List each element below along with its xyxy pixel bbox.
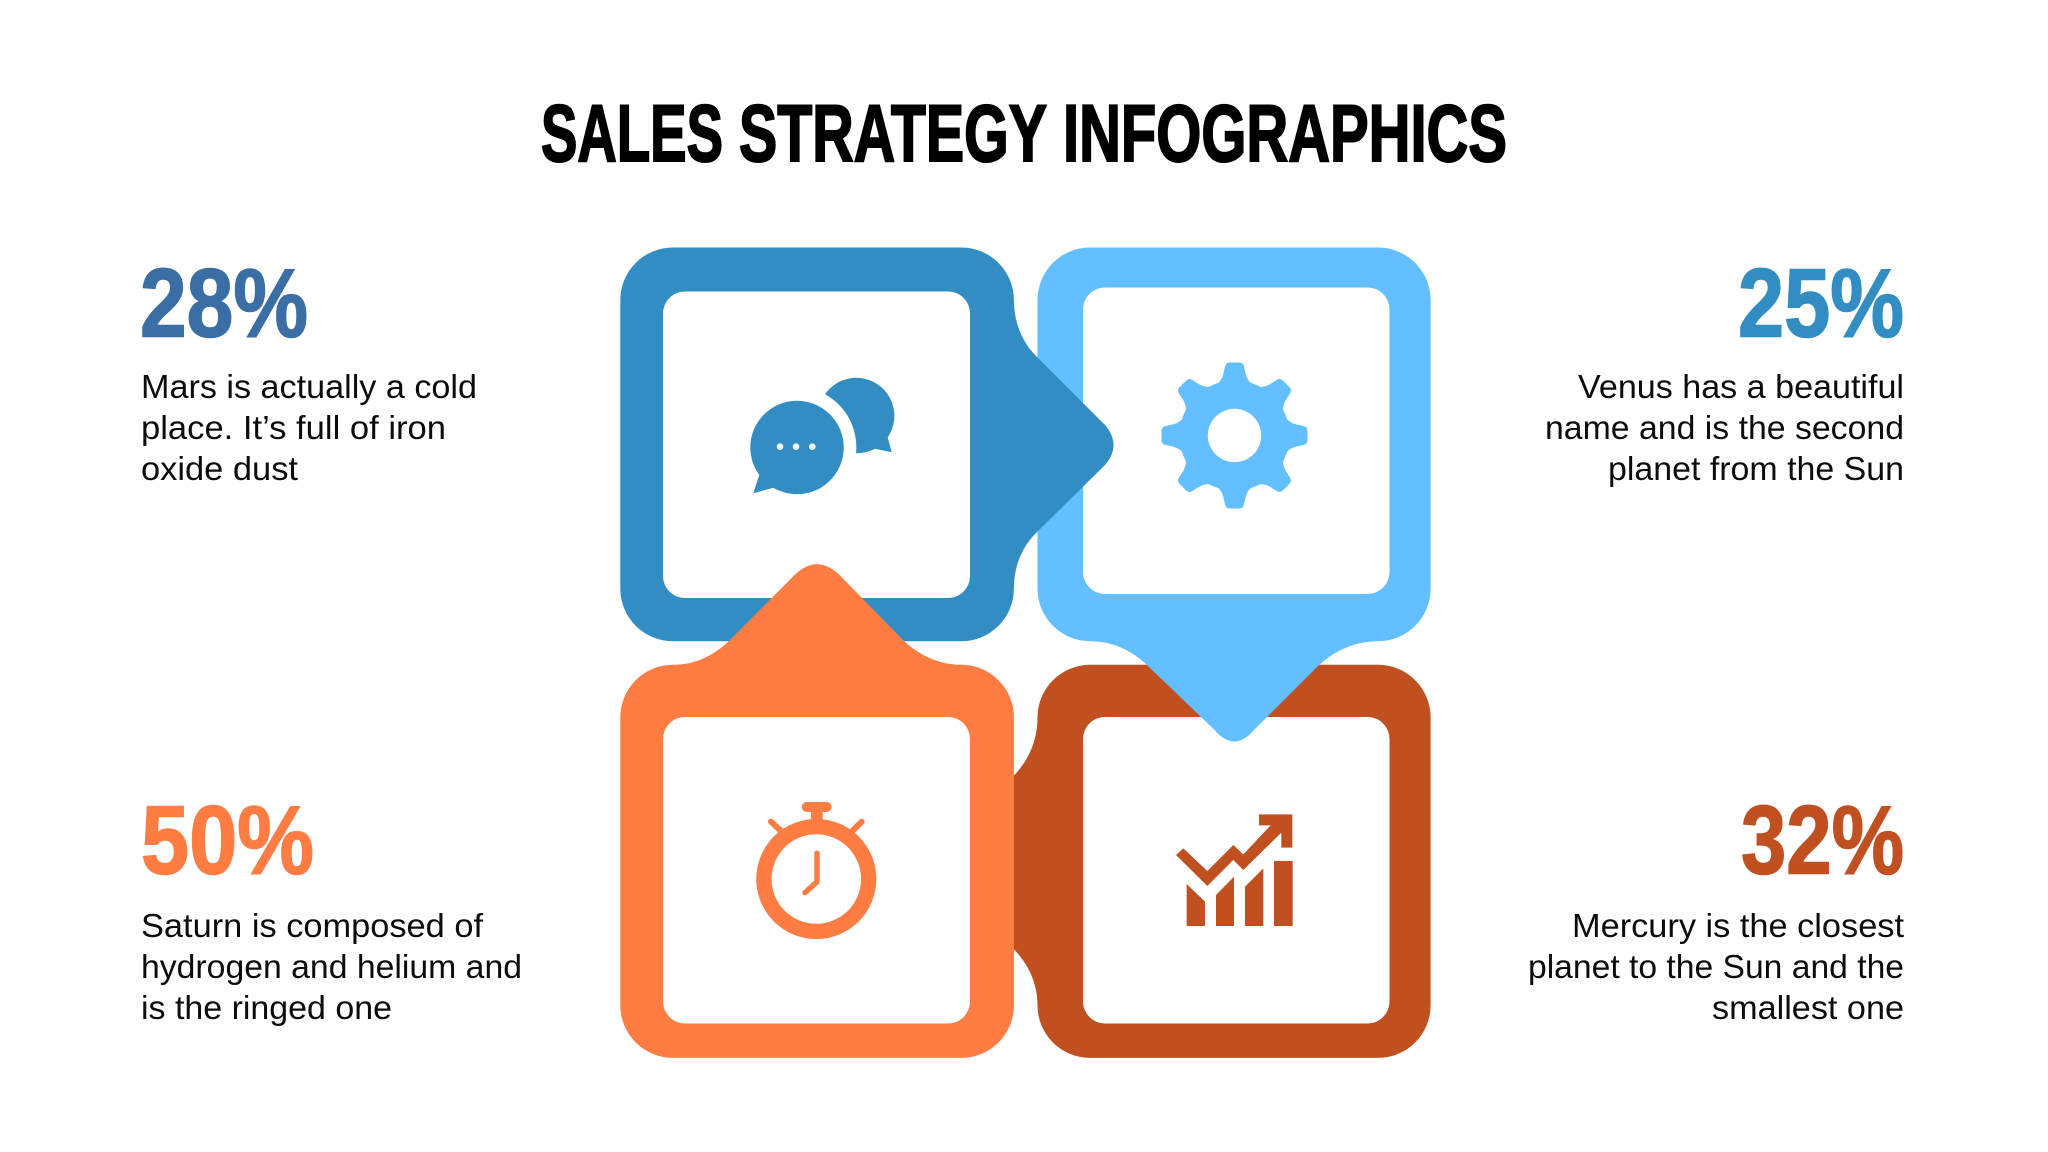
description: Venus: planet from the Sun (1608, 450, 1904, 487)
description: Saturn (141, 907, 522, 1026)
description: Mercury: Mercury is the closest (1572, 907, 1904, 944)
description: Mars (141, 368, 477, 487)
stat block: 50% Saturn (141, 786, 522, 1026)
icon: stopwatch (764, 802, 869, 931)
panel: orange stopwatch tile (620, 564, 1014, 1058)
title (541, 89, 1507, 179)
description: Venus: name and is the second (1545, 409, 1904, 446)
description: Saturn: hydrogen and helium and (141, 948, 522, 985)
description: Mercury: planet to the Sun and the (1528, 948, 1904, 985)
description: Mars: place. It’s full of iron (141, 409, 446, 446)
description: Saturn: is the ringed one (141, 989, 392, 1026)
description: Mars: Mars is actually a cold (141, 368, 477, 405)
stat value: 28%: 28% (140, 248, 308, 358)
panel: brown chart tile (1000, 665, 1431, 1058)
title: SALES (541, 89, 723, 179)
panel: blue chat tile (620, 247, 1114, 641)
title: INFOGRAPHICS (1063, 89, 1507, 179)
icon: gear (1162, 362, 1308, 508)
description: Saturn: Saturn is composed of (141, 907, 484, 944)
stat block: 32% Mercury (1528, 786, 1904, 1026)
stat value: 25%: 25% (1738, 248, 1904, 358)
icon: growth chart (1176, 814, 1293, 926)
panel: light blue gear tile (1038, 248, 1431, 742)
stat value: 32%: 32% (1741, 786, 1904, 894)
description: Venus (1545, 368, 1904, 487)
stat block: 28% Mars (140, 248, 477, 487)
description: Mercury: smallest one (1712, 989, 1904, 1026)
stat block: 25% Venus (1545, 248, 1904, 487)
title: STRATEGY (739, 89, 1047, 179)
description: Venus: Venus has a beautiful (1578, 368, 1904, 405)
description: Mars: oxide dust (141, 450, 298, 487)
stat value: 50%: 50% (141, 786, 314, 894)
description: Mercury (1528, 907, 1904, 1026)
icon: chat bubbles (750, 378, 894, 494)
